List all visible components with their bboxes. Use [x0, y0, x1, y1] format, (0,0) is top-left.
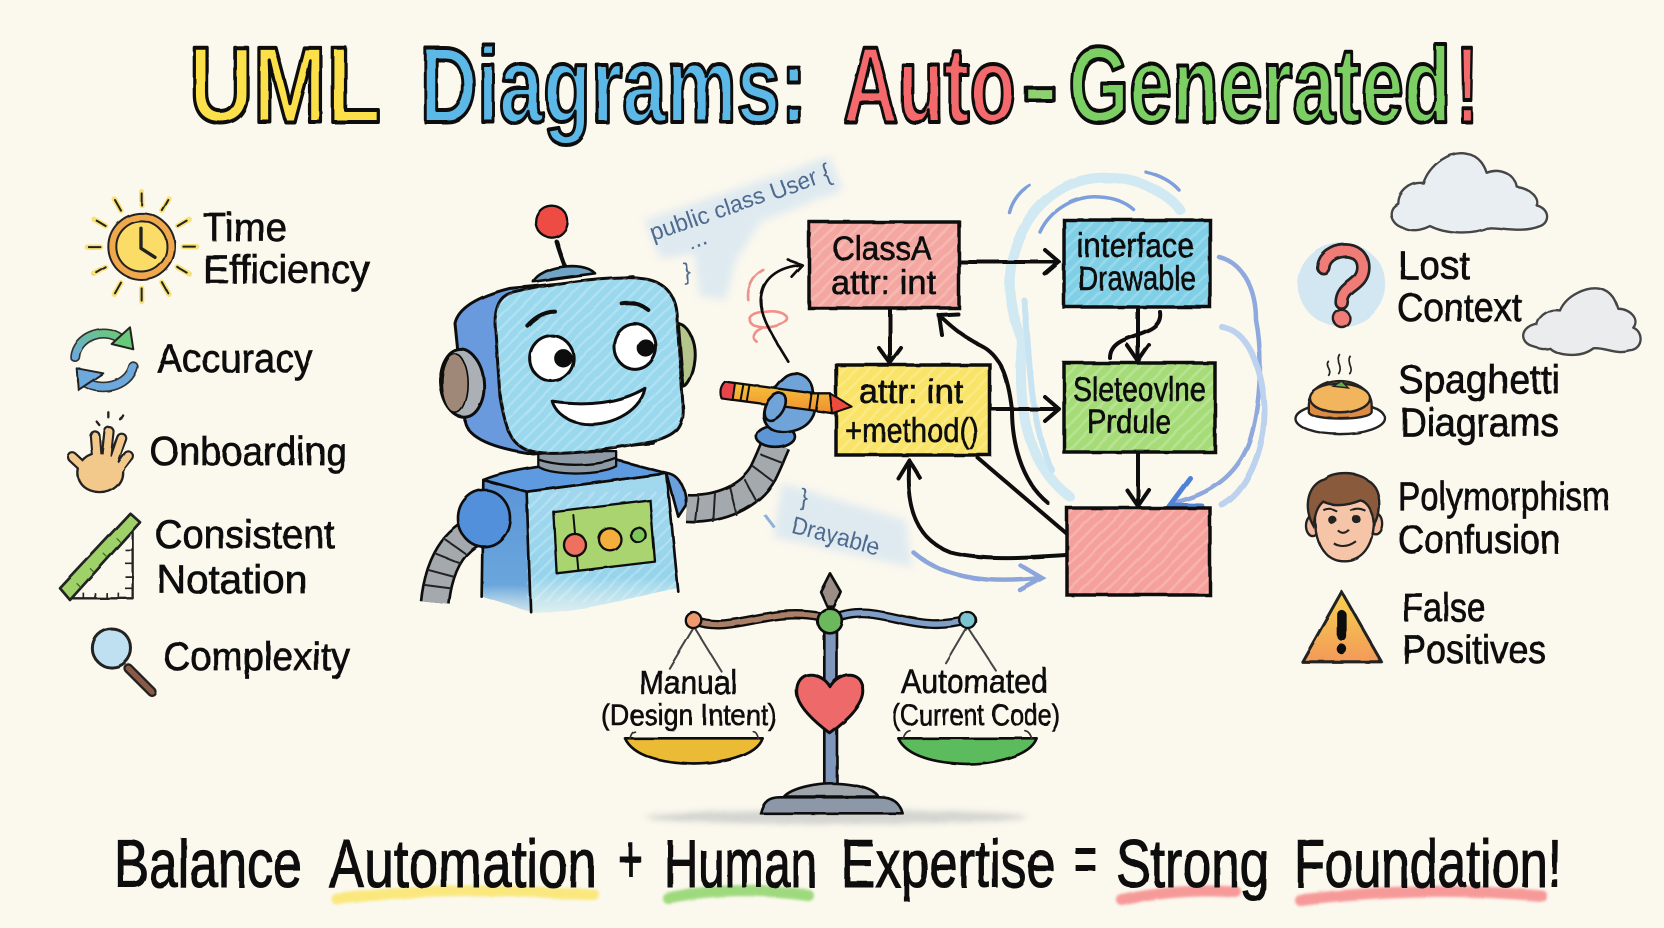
robot antenna	[533, 206, 595, 282]
text: Spaghetti Diagrams: Spaghetti	[1398, 358, 1560, 402]
code snippet: Drayable	[765, 483, 912, 567]
robot right arm	[687, 443, 783, 522]
icon: clouds	[1391, 153, 1641, 355]
text: Lost Context: Context	[1397, 286, 1522, 330]
class box: interface Drawable: interface	[1077, 227, 1194, 265]
icon: magnifier	[92, 629, 152, 692]
title: Generated	[1069, 24, 1451, 145]
text: conclusion sentence: Automation	[329, 826, 597, 902]
scale drawing	[625, 573, 1037, 813]
text: Lost Context	[1397, 244, 1522, 330]
label: Automated: Automated	[901, 663, 1048, 701]
conclusion	[114, 821, 1562, 902]
text: Polymorphism Confusion: Polymorphism	[1398, 475, 1610, 519]
label: Manual: Manual	[639, 664, 737, 702]
icon: spaghetti plate	[1295, 354, 1385, 434]
robot neck	[538, 452, 617, 474]
class box: interface Drawable: Drawable	[1078, 260, 1196, 298]
class box: ClassA: ClassA	[832, 230, 932, 268]
code snippet: public class User: }	[682, 258, 693, 286]
text: Onboarding: Onboarding	[150, 430, 347, 474]
text: Consistent Notation	[155, 513, 335, 602]
text: Polymorphism Confusion: Confusion	[1398, 518, 1560, 562]
text: Lost Context: Lost	[1398, 244, 1470, 288]
text: conclusion sentence: Strong	[1116, 826, 1269, 902]
title	[189, 24, 1478, 145]
code snippet: Drayable: }	[799, 484, 810, 512]
text: conclusion sentence	[114, 821, 1562, 902]
text: conclusion sentence: Foundation!	[1294, 826, 1562, 902]
text: Time Efficiency: Time	[203, 206, 287, 250]
robot hand and crayon	[721, 373, 852, 447]
text: conclusion sentence: Balance	[114, 826, 302, 902]
balance scale	[601, 573, 1060, 824]
text: Accuracy: Accuracy	[157, 337, 313, 381]
UML diagram	[809, 220, 1215, 595]
icon: sun clock	[87, 192, 197, 302]
text: conclusion sentence: Human	[664, 826, 817, 902]
class box: ClassA	[809, 222, 959, 308]
code snippet: public class User	[645, 157, 842, 300]
arrows between classes	[879, 250, 1160, 558]
label: Manual	[601, 664, 777, 732]
crayon underlines	[337, 891, 1542, 900]
class box: Sleteovlne Prdule: Prdule	[1087, 403, 1171, 441]
robot chest panel	[553, 500, 655, 573]
title: UML	[189, 24, 381, 145]
text: Time Efficiency	[203, 206, 370, 292]
code snippet: public class User: ...	[683, 223, 711, 256]
title: !	[1456, 24, 1478, 145]
text: False Positives	[1402, 586, 1546, 672]
robot eyes	[527, 303, 656, 381]
panel: pitfalls list	[1295, 153, 1641, 672]
text: Consistent Notation: Consistent	[155, 513, 335, 557]
label: Manual: (Design Intent)	[601, 699, 777, 732]
robot	[425, 206, 783, 612]
text: False Positives: Positives	[1402, 628, 1546, 672]
label: Automated	[892, 663, 1060, 732]
panel: benefits list	[60, 192, 370, 692]
text: Complexity: Complexity	[163, 635, 350, 679]
text: conclusion sentence: =	[1074, 821, 1097, 897]
icon: waving hand	[73, 412, 128, 493]
title: Diagrams:	[420, 24, 807, 145]
title: -	[1022, 24, 1058, 145]
UML diagram swirls	[914, 172, 1265, 590]
icon: warning triangle	[1302, 592, 1382, 662]
class box: empty red	[1067, 508, 1210, 595]
class box: attr method	[836, 365, 990, 455]
text: conclusion sentence: Expertise	[841, 826, 1055, 902]
text: Polymorphism Confusion	[1398, 475, 1610, 562]
class box: Sleteovlne Prdule: Sleteovlne	[1073, 371, 1206, 409]
class box: Sleteovlne Prdule	[1064, 363, 1215, 452]
robot mouth	[553, 388, 645, 424]
text: Spaghetti Diagrams: Diagrams	[1400, 401, 1559, 445]
text: Time Efficiency: Efficiency	[203, 248, 370, 292]
title: Auto	[843, 24, 1016, 145]
code snippet: public class User: public class User {	[646, 159, 835, 247]
scale shadow	[646, 810, 1026, 824]
class box: attr method: +method()	[845, 412, 979, 450]
icon: refresh arrows	[75, 327, 133, 390]
robot head	[438, 277, 695, 454]
icon: question mark	[1298, 243, 1386, 327]
text: False Positives: False	[1402, 586, 1486, 630]
arrow: hand-drawn arrow to ClassA	[748, 260, 802, 362]
text: conclusion sentence: +	[618, 821, 643, 897]
class box: interface Drawable	[1064, 220, 1210, 307]
label: Automated: (Current Code)	[892, 699, 1060, 732]
text: Spaghetti Diagrams	[1398, 358, 1560, 445]
robot left arm	[425, 532, 475, 603]
icon: confused face	[1306, 474, 1383, 561]
robot body	[458, 460, 686, 612]
class box: attr method: attr: int	[859, 373, 964, 411]
class box: ClassA: attr: int	[831, 264, 937, 302]
text: Consistent Notation: Notation	[157, 558, 307, 602]
code snippet: Drayable: Drayable	[788, 512, 882, 561]
icon: ruler and set square	[60, 513, 140, 600]
